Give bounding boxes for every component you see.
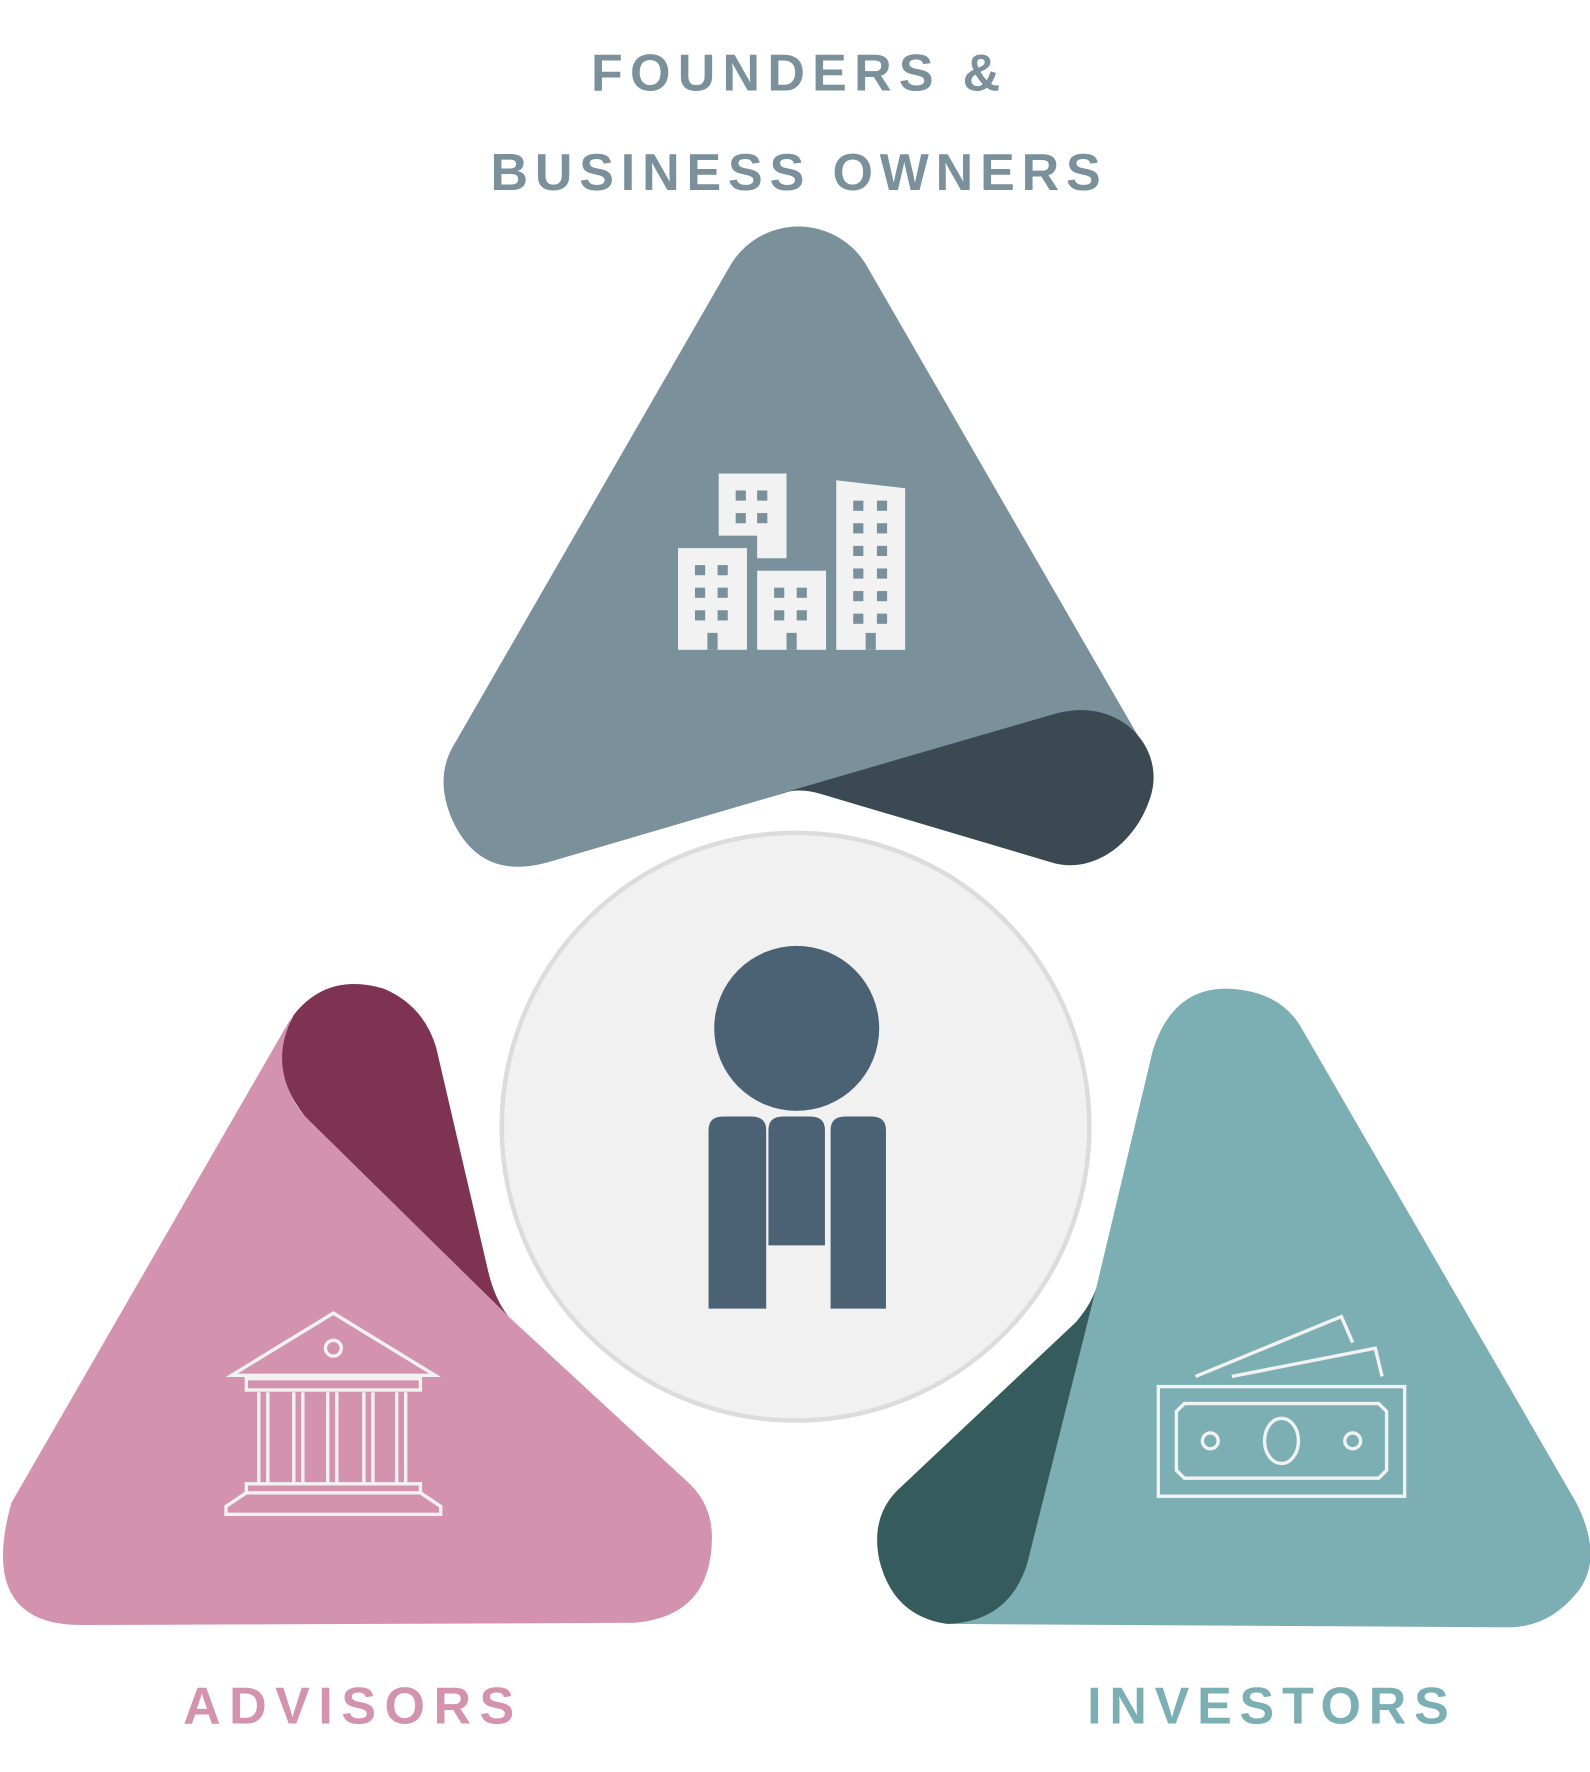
panel: advisors triangle <box>3 984 712 1625</box>
center circle with person <box>502 833 1089 1421</box>
label: advisors: ADVISORS <box>183 1677 514 1735</box>
title: founders & business owners: FOUNDERS & <box>591 44 1000 102</box>
icon: person <box>709 946 886 1309</box>
panel: founders triangle <box>444 227 1154 867</box>
title: founders & business owners <box>490 44 1101 202</box>
icon: buildings <box>678 474 905 650</box>
title: founders & business owners: BUSINESS OWNERS <box>490 144 1101 202</box>
icon: money <box>1158 1317 1405 1496</box>
panel: investors triangle <box>877 989 1590 1627</box>
icon: bank <box>226 1313 441 1514</box>
label: investors: INVESTORS <box>1087 1677 1449 1735</box>
